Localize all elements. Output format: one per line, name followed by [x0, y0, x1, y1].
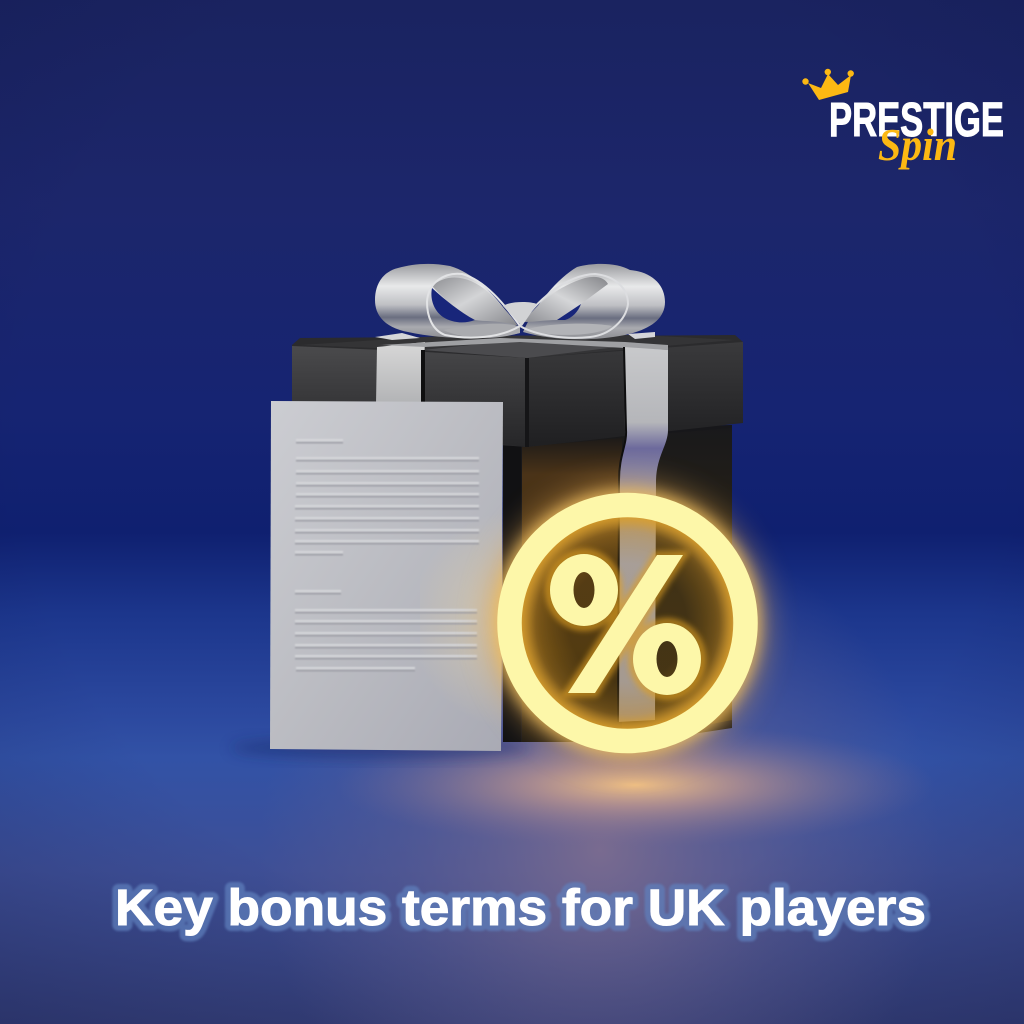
- icon: crown: [802, 69, 854, 100]
- box lid: [292, 335, 743, 447]
- box body: [503, 425, 732, 742]
- ribbon bands: [375, 332, 668, 722]
- logo: Prestige Spin: [802, 69, 1004, 170]
- percent sign: [550, 554, 701, 695]
- glowing percent badge: [504, 499, 752, 747]
- title: Key bonus terms for UK players: [115, 879, 926, 936]
- bow: centre knot: [503, 302, 537, 326]
- silver bow: [375, 264, 665, 339]
- badge glow: [504, 499, 752, 747]
- embossed lines: [295, 439, 479, 672]
- title: Key bonus terms for UK players: [115, 879, 926, 936]
- document page with embossed text lines: [270, 401, 503, 751]
- ring: [510, 505, 746, 741]
- bow: right loop: [520, 264, 665, 339]
- gift box: [292, 264, 743, 742]
- bow: left loop: [375, 264, 520, 338]
- logo script: Spin: [878, 119, 957, 170]
